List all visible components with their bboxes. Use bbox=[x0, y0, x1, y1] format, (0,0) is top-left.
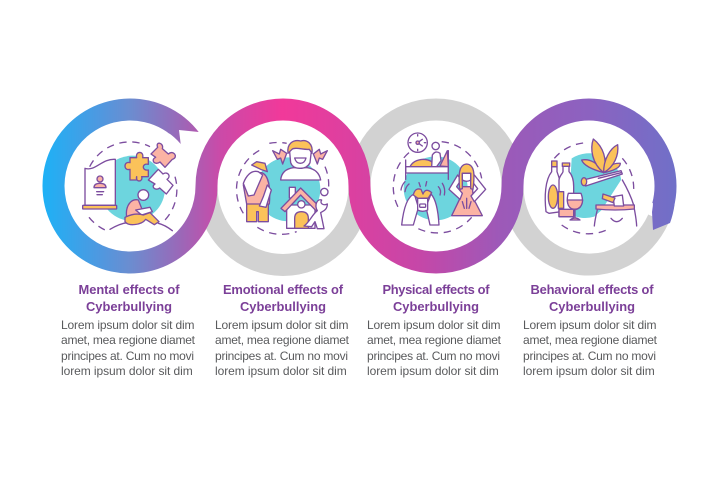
angry man bbox=[281, 141, 321, 180]
heading: emotional: Cyberbullying bbox=[240, 299, 326, 314]
column 2 text bbox=[215, 282, 350, 378]
body: behavioral: lorem ipsum dolor sit dim bbox=[523, 364, 655, 378]
heading: emotional bbox=[223, 282, 344, 314]
body: behavioral: amet, mea regione diamet bbox=[523, 333, 658, 347]
gradient ribbon bbox=[54, 110, 675, 263]
puzzle pieces bbox=[125, 143, 175, 194]
body: emotional: Lorem ipsum dolor sit dim bbox=[215, 318, 348, 332]
icon: mental effects bbox=[83, 142, 177, 231]
body: emotional: lorem ipsum dolor sit dim bbox=[215, 364, 347, 378]
body: physical: principes at. Cum no movi bbox=[367, 349, 500, 363]
woman in dress bbox=[449, 164, 486, 216]
body: physical: amet, mea regione diamet bbox=[367, 333, 502, 347]
heading: behavioral: Behavioral effects of bbox=[530, 282, 654, 297]
grey ring segments bbox=[206, 110, 658, 265]
icon: behavioral effects bbox=[545, 139, 637, 234]
seated person bbox=[110, 190, 172, 231]
heading: mental bbox=[78, 282, 180, 314]
heading: behavioral bbox=[530, 282, 654, 314]
heading: mental: Cyberbullying bbox=[86, 299, 172, 314]
body: physical: lorem ipsum dolor sit dim bbox=[367, 364, 499, 378]
heading: mental: Mental effects of bbox=[78, 282, 180, 297]
body: emotional: amet, mea regione diamet bbox=[215, 333, 350, 347]
column 1 text bbox=[61, 282, 196, 378]
person covering ears bbox=[401, 182, 445, 225]
torso bbox=[594, 180, 637, 226]
icon: physical effects bbox=[393, 133, 486, 233]
body: behavioral bbox=[523, 318, 658, 378]
body: mental: Lorem ipsum dolor sit dim bbox=[61, 318, 194, 332]
column 3 text bbox=[367, 282, 502, 378]
body: physical bbox=[367, 318, 502, 378]
body: behavioral: Lorem ipsum dolor sit dim bbox=[523, 318, 656, 332]
clock bbox=[408, 133, 427, 152]
body: mental: amet, mea regione diamet bbox=[61, 333, 196, 347]
heading: physical: Physical effects of bbox=[382, 282, 490, 297]
body: physical: Lorem ipsum dolor sit dim bbox=[367, 318, 500, 332]
heading: emotional: Emotional effects of bbox=[223, 282, 344, 297]
icon: emotional effects bbox=[237, 141, 329, 234]
sad person bbox=[243, 162, 271, 222]
house bbox=[281, 187, 320, 228]
heading: physical: Cyberbullying bbox=[393, 299, 479, 314]
lightning bolts bbox=[273, 149, 327, 164]
cannabis leaf bbox=[582, 139, 620, 173]
body: mental bbox=[61, 318, 196, 378]
column 4 text bbox=[523, 282, 658, 378]
body: behavioral: principes at. Cum no movi bbox=[523, 349, 656, 363]
heading: physical bbox=[382, 282, 490, 314]
body: emotional: principes at. Cum no movi bbox=[215, 349, 348, 363]
child bbox=[304, 188, 328, 229]
body: mental: principes at. Cum no movi bbox=[61, 349, 194, 363]
tombstone bbox=[83, 159, 117, 209]
body: emotional bbox=[215, 318, 350, 378]
bottles bbox=[545, 161, 574, 217]
bed bbox=[406, 142, 448, 179]
body: mental: lorem ipsum dolor sit dim bbox=[61, 364, 193, 378]
heading: behavioral: Cyberbullying bbox=[549, 299, 635, 314]
joint bbox=[581, 171, 622, 186]
wine glass bbox=[567, 193, 583, 220]
